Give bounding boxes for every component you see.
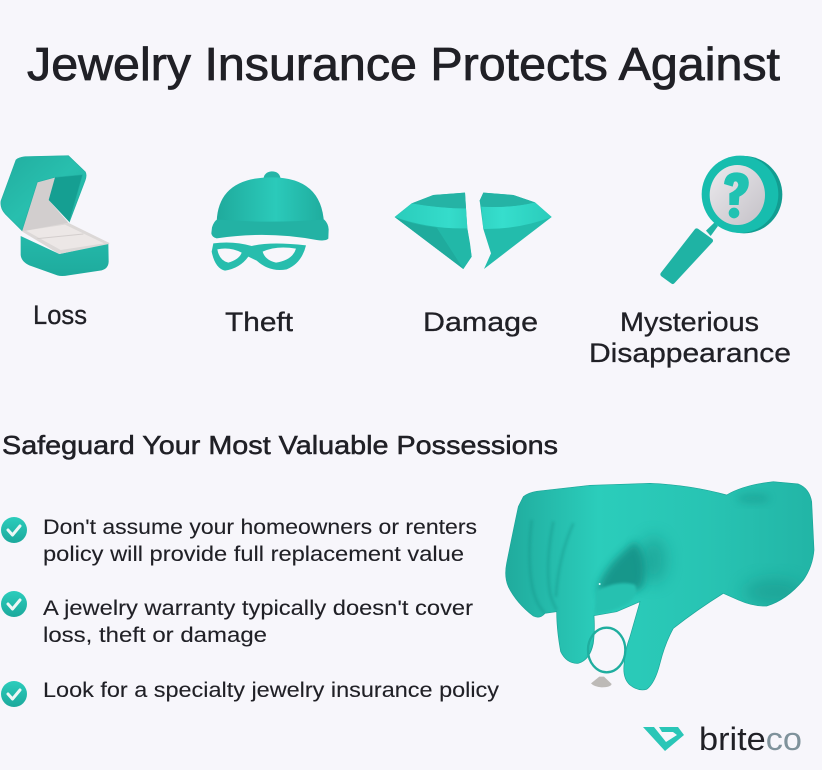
shadow: wrist underside <box>743 579 803 604</box>
ring diamond <box>591 677 612 687</box>
title: Jewelry Insurance Protects Against <box>27 38 780 90</box>
icon: broken diamond <box>395 193 552 269</box>
label: Loss: Loss <box>33 300 87 330</box>
label: Mysterious Disappearance: Disappearance <box>589 338 791 368</box>
label: Theft: Theft <box>225 307 294 337</box>
index finger shading <box>587 638 594 657</box>
icon: check <box>1 591 27 617</box>
logo: briteco <box>643 721 802 757</box>
logo: briteco: briteco <box>699 721 802 757</box>
curled finger <box>594 583 636 615</box>
finger creases <box>529 520 573 613</box>
ring <box>588 628 625 672</box>
bullet 2: A jewelry warranty typically doesn't cover <box>43 597 473 620</box>
illustration: gloved hand holding ring <box>506 482 814 690</box>
logo mark <box>643 727 684 751</box>
shadow: behind thumb <box>640 537 667 583</box>
bullet 3: Look for a specialty jewelry insurance policy <box>43 679 500 702</box>
label: Mysterious Disappearance <box>589 307 791 368</box>
icon: magnifying glass with question mark <box>663 156 782 282</box>
icon: open ring box <box>1 156 109 276</box>
icon: check <box>1 681 27 707</box>
bullet 2: loss, theft or damage <box>43 624 267 647</box>
icon: robber hat and mask <box>211 171 329 271</box>
shadow: wrist top crease <box>737 493 770 504</box>
shadow: palm hollow <box>598 542 645 597</box>
bullet 3 <box>1 679 500 707</box>
bullet 1: Don't assume your homeowners or renters <box>43 516 477 539</box>
bullet 2 <box>1 591 473 647</box>
heading: safeguard: Safeguard Your Most Valuable Possessions <box>2 430 558 460</box>
label: Mysterious Disappearance: Mysterious <box>620 307 759 337</box>
icon: check <box>1 517 27 543</box>
label: Damage: Damage <box>423 307 538 337</box>
bullet 1: policy will provide full replacement value <box>43 543 464 566</box>
bullet 1 <box>1 516 477 566</box>
